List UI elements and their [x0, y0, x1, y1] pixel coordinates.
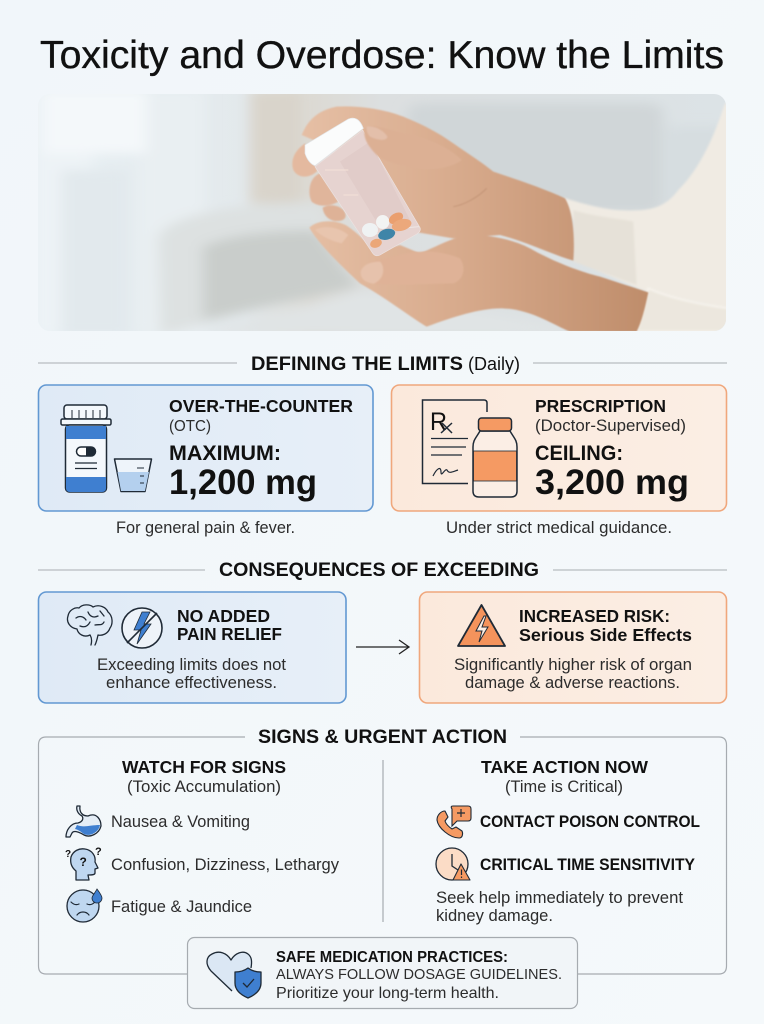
- icon: confused head: ?: [80, 855, 87, 869]
- icon: prescription sheet and bottle: [422, 400, 517, 497]
- panel: prescription limit: CEILING:: [535, 441, 623, 465]
- column: watch for signs: [65, 757, 340, 922]
- panel: signs and urgent action: [38, 726, 726, 974]
- column: take action now: [436, 757, 700, 925]
- panel: over-the-counter limit: (OTC): [169, 418, 211, 435]
- sweater sleeve: [563, 103, 728, 332]
- caption: OTC: For general pain & fever.: [116, 519, 295, 537]
- icon: crossed-out lightning bolt: [122, 608, 162, 648]
- panel: over-the-counter limit: [38, 385, 373, 511]
- icon: confused head: ?: [95, 846, 102, 858]
- column: take action now: (Time is Critical): [505, 778, 623, 796]
- panel: no added pain relief: PAIN RELIEF: [177, 624, 282, 644]
- panel: no added pain relief: Exceeding limits does not: [97, 656, 286, 674]
- hands: [292, 106, 648, 332]
- arrow: exceeding leads to risk: [356, 640, 409, 654]
- panel: increased risk: Serious Side Effects: [519, 625, 692, 645]
- panel: prescription limit: [392, 385, 726, 511]
- column: take action now: CRITICAL TIME SENSITIVITY: [480, 856, 695, 874]
- icon: stomach: [66, 806, 101, 837]
- column: watch for signs: Fatigue & Jaundice: [111, 898, 252, 916]
- column: take action now: CONTACT POISON CONTROL: [480, 813, 700, 831]
- section heading: defining the limits: DEFINING THE LIMITS: [251, 353, 463, 375]
- hero photo: hands holding a pill bottle: [34, 90, 728, 337]
- callout: safe medication practices: ALWAYS FOLLOW DOSAGE GUIDELINES.: [276, 966, 562, 983]
- callout: safe medication practices: [188, 938, 578, 1008]
- icon: confused head: [65, 846, 102, 880]
- icon: warning triangle with bolt: [458, 605, 505, 646]
- section heading: defining the limits: [38, 353, 727, 375]
- column: take action now: Seek help immediately to prevent: [436, 889, 683, 907]
- section heading: consequences of exceeding: CONSEQUENCES OF EXCEEDING: [219, 559, 539, 581]
- callout: safe medication practices: SAFE MEDICATION PRACTICES:: [276, 949, 508, 966]
- icon: brain: [67, 605, 112, 645]
- panel: over-the-counter limit: OVER-THE-COUNTER: [169, 396, 353, 416]
- icon: tired face with sweat drop: [67, 889, 102, 922]
- panel: prescription limit: PRESCRIPTION: [535, 396, 666, 416]
- panel: prescription limit: (Doctor-Supervised): [535, 417, 686, 435]
- icon: heart and shield: [207, 952, 261, 998]
- title: Toxicity and Overdose: Know the Limits: [40, 34, 724, 77]
- column: watch for signs: WATCH FOR SIGNS: [122, 757, 286, 777]
- panel: prescription limit: 3,200 mg: [535, 463, 689, 502]
- column: watch for signs: Confusion, Dizziness, Lethargy: [111, 856, 340, 874]
- icon: confused head: ?: [65, 849, 71, 860]
- panel: no added pain relief: enhance effectiveness.: [106, 674, 277, 692]
- pills: [362, 223, 378, 237]
- column: take action now: kidney damage.: [436, 907, 553, 925]
- icon: prescription sheet and bottle: R: [430, 408, 447, 436]
- icon: OTC pill bottle and dosing cup: [61, 405, 152, 492]
- callout: safe medication practices: Prioritize your long-term health.: [276, 985, 499, 1002]
- panel: increased risk: damage & adverse reactions.: [465, 674, 680, 692]
- caption: prescription: Under strict medical guidance.: [446, 519, 672, 537]
- panel: no added pain relief: NO ADDED: [177, 606, 270, 626]
- icon: phone with medical chat bubble: [437, 806, 471, 838]
- heading: signs and urgent action: SIGNS & URGENT ACTION: [258, 726, 507, 748]
- panel: over-the-counter limit: 1,200 mg: [169, 463, 317, 502]
- column: take action now: TAKE ACTION NOW: [481, 757, 649, 777]
- thumbs over the bottle: [361, 126, 463, 285]
- panel: increased risk: Significantly higher risk of organ: [454, 656, 692, 674]
- section heading: defining the limits: (Daily): [468, 354, 520, 374]
- panel: increased risk: INCREASED RISK:: [519, 606, 670, 626]
- pill bottle: [305, 118, 420, 256]
- icon: clock with warning: [436, 848, 470, 880]
- column: watch for signs: (Toxic Accumulation): [127, 778, 281, 796]
- panel: no added pain relief: [38, 592, 346, 703]
- column: watch for signs: Nausea & Vomiting: [111, 813, 250, 831]
- panel: increased risk: [420, 592, 726, 703]
- panel: over-the-counter limit: MAXIMUM:: [169, 441, 281, 465]
